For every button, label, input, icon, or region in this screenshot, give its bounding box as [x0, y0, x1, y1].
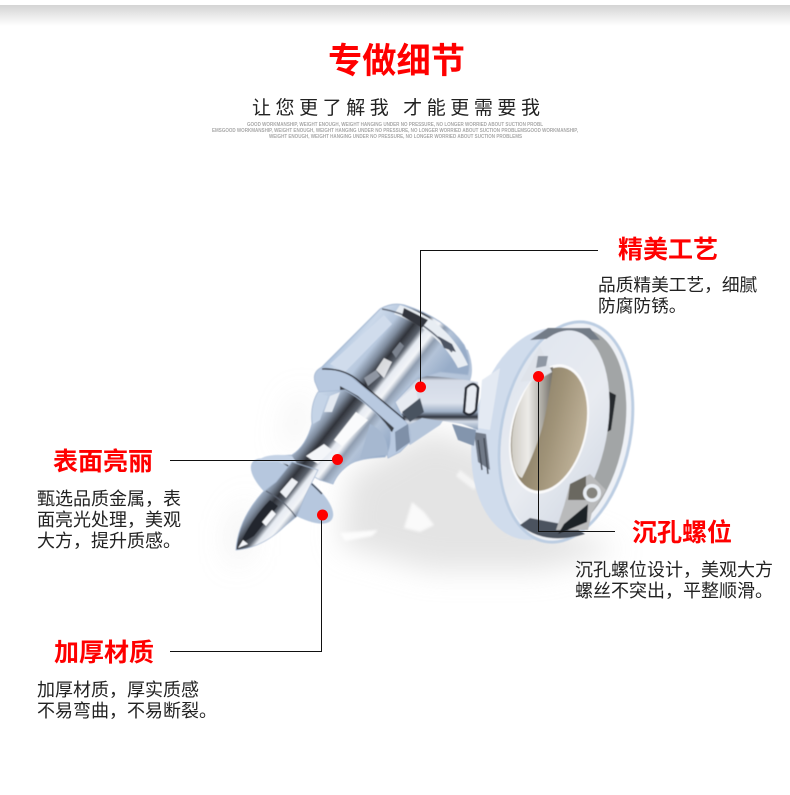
callout: 加厚材质: 加厚材质，厚实质感	[37, 680, 199, 700]
small english caption: GOOD WORKMANSHIP, WEIGHT ENOUGH, WEIGHT HANGING UNDER NO PRESSURE, NO LONGER WORRIED ABOUT SUCTION PROBL	[247, 122, 543, 128]
back flange of disk	[454, 316, 628, 552]
subtitle: 让您更了解我 才能更需要我	[252, 97, 540, 119]
top shadow band	[0, 5, 790, 26]
leader line: 表面亮丽	[170, 460, 338, 462]
small english caption: EMSGOOD WORKMANSHIP, WEIGHT ENOUGH, WEIGHT HANGING UNDER NO PRESSURE, NO LONGER WORRIED ABOUT SUCTION PROBLEMSGOOD WORKMANSHIP,	[212, 128, 578, 134]
callout: 沉孔螺位: 沉孔螺位	[632, 518, 732, 547]
disk front	[480, 308, 652, 556]
flat inner face	[485, 321, 625, 539]
callout: 精美工艺: 防腐防锈。	[598, 296, 686, 316]
callout: 沉孔螺位	[575, 518, 773, 601]
shadow reflections	[340, 470, 478, 541]
callout: 精美工艺: 精美工艺	[618, 236, 718, 264]
title: 专做细节	[328, 42, 465, 81]
callout: 表面亮丽: 表面亮丽	[53, 448, 153, 476]
screw boss	[556, 474, 606, 530]
callout: 加厚材质: 不易弯曲，不易断裂。	[37, 701, 217, 721]
callout: 表面亮丽	[37, 448, 181, 551]
red marker dots	[317, 371, 544, 520]
product: chrome fitting	[236, 304, 652, 556]
neck	[276, 390, 390, 484]
collar	[314, 367, 410, 458]
bore	[496, 356, 602, 502]
cylinder body	[322, 304, 469, 420]
callout: 加厚材质: 加厚材质	[54, 639, 154, 667]
rim inner wall	[489, 318, 643, 546]
callout: 沉孔螺位: 沉孔螺位设计，美观大方	[575, 560, 773, 580]
callout: 精美工艺: 品质精美工艺，细腻	[598, 275, 758, 295]
callout: 精美工艺	[598, 236, 758, 316]
leader line: 精美工艺	[420, 250, 598, 387]
small english caption	[212, 122, 578, 140]
connecting pipe	[392, 376, 478, 446]
rear of cylinder behind pipe	[390, 330, 472, 445]
callout: 沉孔螺位: 螺丝不突出，平整顺滑。	[575, 581, 773, 601]
callout: 表面亮丽: 面亮光处理，美观	[37, 510, 181, 530]
callout: 加厚材质	[37, 639, 217, 721]
countersunk screw hole	[520, 346, 552, 382]
lower flange disk	[241, 447, 343, 535]
leader line: 沉孔螺位	[538, 376, 615, 532]
product cast shadow	[228, 392, 620, 570]
callout: 表面亮丽: 甄选品质金属，表	[37, 489, 181, 509]
callout: 表面亮丽: 大方，提升质感。	[37, 531, 181, 551]
tip and shaft	[236, 462, 318, 550]
leader line: 加厚材质	[170, 515, 322, 652]
small english caption: WEIGHT ENOUGH, WEIGHT HANGING UNDER NO PRESSURE, NO LONGER WORRIED ABOUT SUCTION PROBLEMS	[269, 134, 522, 140]
